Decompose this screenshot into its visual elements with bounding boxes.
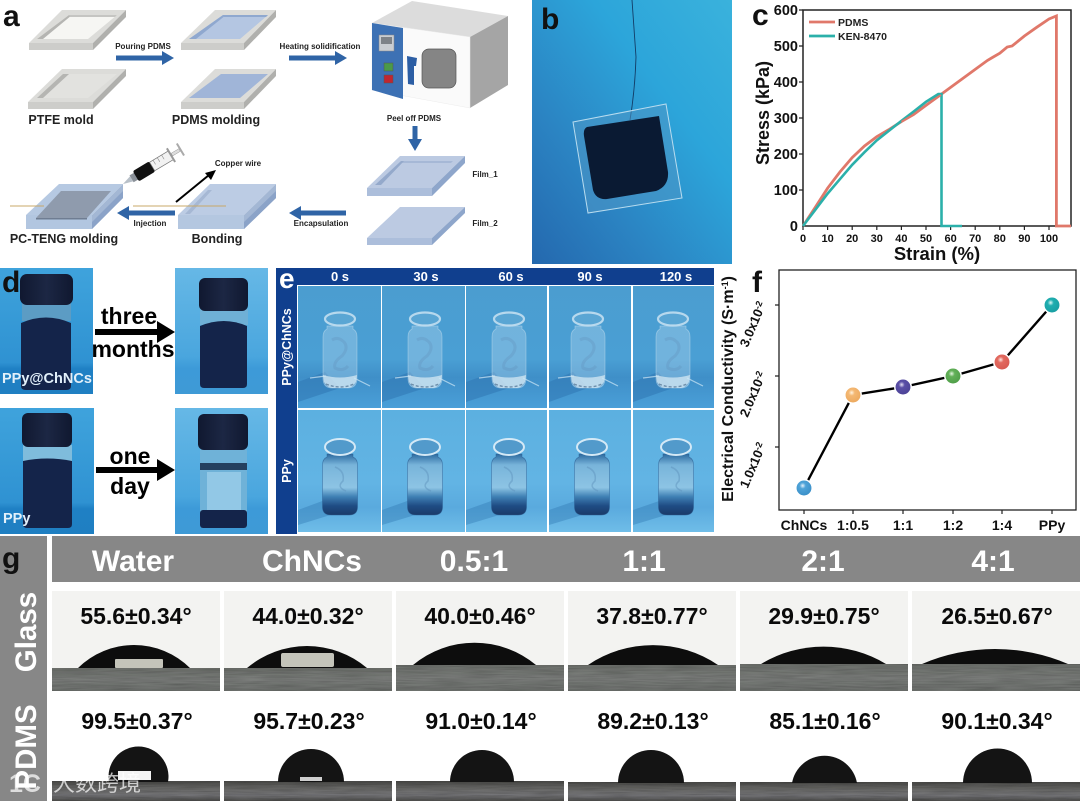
x ticks: 50 (920, 233, 932, 245)
glass row angles: 55.6±0.34° (80, 603, 192, 629)
label: Film_1: Film_1 (472, 170, 498, 179)
label: day: day (110, 473, 150, 499)
PDMS curve overlay (901, 95, 941, 122)
y ticks: 100 (774, 183, 798, 199)
PDMS curve (803, 16, 1071, 226)
y tick labels: -2 (752, 369, 764, 381)
connecting line (804, 305, 1052, 488)
label: Film_2: Film_2 (472, 219, 498, 228)
glass row angles: 29.9±0.75° (768, 603, 880, 629)
PC-TENG block (10, 184, 123, 229)
left band (276, 268, 297, 534)
bonding block (133, 184, 276, 229)
PDMS row droplets (108, 747, 1032, 783)
panel a: fabrication process (3, 0, 508, 246)
column headers: 2:1 (801, 545, 845, 578)
header times: 120 s (660, 269, 692, 284)
panel label b: b (541, 3, 559, 36)
bottom row cells (298, 410, 714, 532)
arrow: three months (95, 321, 175, 343)
panel e: dispersion in water time series (276, 263, 714, 534)
label: pouring PDMS: Pouring PDMS (115, 42, 171, 51)
legend: KEN-8470 (838, 31, 887, 43)
y tick labels: -2 (752, 440, 764, 452)
label: copper wire: Copper wire (215, 159, 262, 168)
y ticks: 0 (790, 219, 798, 235)
panel f: electrical conductivity chart (720, 266, 1076, 533)
transparent film (573, 104, 682, 213)
x tick labels (781, 517, 1065, 533)
x tick labels: 1:2 (943, 517, 963, 533)
PTFE mold tray top (29, 10, 126, 50)
label: peel off PDMS: Peel off PDMS (387, 114, 442, 123)
header times: 90 s (577, 269, 603, 284)
label: encapsulation: Encapsulation (294, 219, 348, 228)
row label PDMS: PDMS (10, 704, 43, 790)
PDMS row angles (81, 708, 1053, 734)
film 2 (367, 207, 465, 245)
top row jars (310, 312, 703, 388)
x ticks: 70 (969, 233, 981, 245)
x tick labels: PPy (1039, 517, 1065, 533)
jar shadows (298, 372, 676, 525)
icon: syringe (119, 142, 185, 191)
panel label e: e (279, 263, 295, 294)
x ticks: 80 (994, 233, 1006, 245)
x ticks: 20 (846, 233, 858, 245)
x ticks: 90 (1018, 233, 1031, 245)
legend: PDMS (838, 17, 868, 29)
photo: PPy@ChNCs after three months (175, 268, 268, 394)
y axis title: Electrical Conductivity (S·m (720, 289, 737, 502)
PDMS row angles: 99.5±0.37° (81, 708, 193, 734)
y tick labels: 3.0x10 (737, 307, 766, 349)
panel d: dispersion stability photos (0, 266, 268, 534)
PDMS tray bottom (181, 69, 276, 109)
y axis title: ) (720, 276, 737, 281)
column headers: ChNCs (262, 545, 362, 578)
label: bonding: Bonding (192, 232, 242, 246)
side band (0, 536, 47, 801)
y axis title: Stress (kPa) (753, 61, 773, 165)
glass row angles: 40.0±0.46° (424, 603, 536, 629)
column headers: 4:1 (971, 545, 1015, 578)
panel label g: g (2, 542, 20, 575)
y ticks: 400 (774, 75, 798, 91)
x tick labels: 1:0.5 (837, 517, 869, 533)
y tick labels: 1.0x10 (737, 448, 766, 490)
panel label a: a (3, 0, 20, 33)
PDMS row substrates (52, 781, 1080, 801)
header times: 60 s (498, 269, 524, 284)
y ticks (774, 3, 798, 235)
glass row angles: 44.0±0.32° (252, 603, 364, 629)
plot frame (779, 270, 1076, 510)
column headers (92, 545, 1015, 578)
PTFE mold tray bottom (28, 69, 126, 109)
PDMS row angles: 90.1±0.34° (941, 708, 1053, 734)
glass row backgrounds (52, 591, 1080, 691)
x ticks: 0 (800, 233, 806, 245)
KEN-8470 curve (803, 94, 962, 226)
photo: PPy@ChNCs initial (0, 268, 93, 394)
label: injection: Injection (134, 219, 167, 228)
column headers: 1:1 (622, 545, 666, 578)
x axis title: Strain (%) (894, 243, 980, 264)
panel g: contact angles (0, 536, 1080, 801)
label: PPy@ChNCs: PPy@ChNCs (2, 371, 92, 387)
tick marks (775, 305, 1052, 514)
photo: PPy after one day (175, 408, 268, 534)
y ticks: 300 (774, 111, 798, 127)
panel label d: d (2, 266, 20, 299)
x ticks: 100 (1040, 233, 1058, 245)
PDMS tray top (181, 10, 276, 50)
x tick labels: 1:4 (992, 517, 1012, 533)
panel c: stress strain chart (752, 0, 1071, 264)
arrow: copper wire pointer (176, 170, 216, 202)
watermark: 1C (9, 770, 41, 798)
black electrode (584, 116, 668, 199)
y ticks: 200 (774, 147, 798, 163)
x tick labels: ChNCs (781, 517, 828, 533)
glass row angles: 37.8±0.77° (596, 603, 708, 629)
label: three: three (101, 303, 157, 329)
panel label f: f (752, 266, 763, 299)
PDMS row angles: 91.0±0.14° (425, 708, 537, 734)
arrow: injection (117, 206, 175, 220)
watermark: 大数跨境 (53, 771, 141, 796)
label: PPy: PPy (3, 511, 30, 527)
PDMS row angles: 89.2±0.13° (597, 708, 709, 734)
glass row substrates (52, 664, 1080, 691)
y tick labels (737, 299, 769, 490)
label: heating solidification: Heating solidification (280, 42, 361, 51)
y ticks: 600 (774, 3, 798, 19)
y tick labels: 2.0x10 (737, 377, 766, 419)
header times: 0 s (331, 269, 349, 284)
column headers: Water (92, 545, 174, 578)
x ticks: 30 (871, 233, 883, 245)
glass row droplets (78, 643, 1068, 668)
arrow: encapsulation (289, 206, 346, 220)
label: months: months (91, 336, 175, 362)
x ticks: 10 (821, 233, 834, 245)
bottom row jars (322, 439, 694, 515)
arrow: one day (96, 459, 175, 481)
film 1 (367, 156, 465, 196)
data points (796, 297, 1060, 496)
panel b: photo of device (532, 0, 732, 264)
arrow: pouring PDMS (116, 51, 174, 65)
copper wire (630, 0, 636, 120)
y axis title: -1 (720, 281, 730, 289)
droplet highlights (115, 653, 334, 668)
label: PC-TENG molding: PC-TENG molding (10, 232, 118, 246)
row label Glass: Glass (10, 592, 43, 672)
arrow: heating (289, 51, 347, 65)
header band (297, 268, 714, 285)
glass row angles: 26.5±0.67° (941, 603, 1053, 629)
y tick labels: -2 (752, 299, 764, 311)
label: PDMS molding: PDMS molding (172, 113, 260, 127)
header times (331, 269, 692, 284)
PDMS row angles: 95.7±0.23° (253, 708, 365, 734)
y ticks: 500 (774, 39, 798, 55)
watermark (9, 770, 141, 798)
x ticks: 40 (895, 233, 908, 245)
x ticks: 60 (944, 233, 957, 245)
label: PTFE mold: PTFE mold (28, 113, 94, 127)
PDMS droplet highlights (118, 771, 322, 781)
header band (52, 536, 1080, 582)
tick marks (799, 10, 1049, 230)
row label PPy: PPy (280, 459, 294, 483)
x tick labels: 1:1 (893, 517, 913, 533)
glass row angles (80, 603, 1053, 629)
label: one: one (110, 443, 150, 469)
header times: 30 s (413, 269, 439, 284)
top row cells (298, 286, 714, 408)
row label PPy@ChNCs: PPy@ChNCs (280, 308, 294, 386)
column headers: 0.5:1 (440, 545, 508, 578)
PDMS row angles: 85.1±0.16° (769, 708, 881, 734)
plot frame (803, 10, 1071, 226)
icon: oven (372, 1, 508, 108)
legend (809, 17, 887, 43)
arrow: peel off (408, 126, 422, 151)
x ticks (800, 233, 1058, 245)
photo: PPy initial (0, 408, 94, 534)
